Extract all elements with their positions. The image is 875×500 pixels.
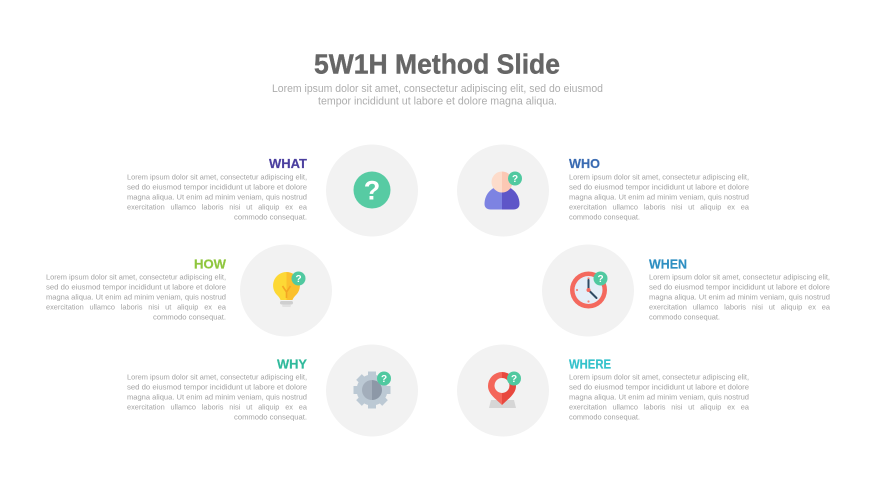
subtitle: Lorem ipsum dolor sit amet, consectetur adipiscing elit, sed do eiusmod (272, 83, 603, 95)
text block: what: commodo consequat. (234, 214, 307, 222)
panel: who (457, 144, 749, 236)
icon: question mark: ? (364, 176, 380, 206)
icon: person (484, 172, 522, 210)
text block: when: Lorem ipsum dolor sit amet, consectetur adipiscing elit, (649, 274, 830, 282)
panel: why (127, 344, 418, 436)
icon: person: ? (512, 174, 518, 185)
text block: what: magna aliqua. Ut enim ad minim veniam, quis nostrud (127, 194, 307, 202)
text block: who: sed do eiusmod tempor incididunt ut labore et dolore (569, 184, 749, 192)
text block: how: sed do eiusmod tempor incididunt ut labore et dolore (46, 284, 226, 292)
icon: clock (570, 272, 608, 308)
text block: who: magna aliqua. Ut enim ad minim veniam, quis nostrud (569, 194, 749, 202)
text block: who: exercitation ullamco laboris nisi ut aliquip ex ea (569, 204, 749, 212)
text block: who: commodo consequat. (569, 214, 640, 222)
text block: why: magna aliqua. Ut enim ad minim veniam, quis nostrud (127, 394, 307, 402)
text block: where: exercitation ullamco laboris nisi ut aliquip ex ea (569, 404, 749, 412)
circle: how (240, 244, 332, 336)
heading: why: WHY (277, 356, 307, 372)
subtitle: tempor incididunt ut labore et dolore magna aliqua. (318, 96, 557, 108)
text block: why: Lorem ipsum dolor sit amet, consectetur adipiscing elit, (127, 374, 307, 382)
icon: light bulb: ? (295, 274, 302, 285)
panel: how (46, 244, 332, 336)
text block: how (46, 274, 226, 322)
heading: what: WHAT (269, 156, 307, 171)
panel: what (127, 144, 418, 236)
text block: when: commodo consequat. (649, 314, 720, 322)
icon: map pin: ? (511, 374, 517, 385)
heading: when: WHEN (649, 256, 687, 272)
circle: what (326, 144, 418, 236)
circle: why (326, 344, 418, 436)
icon: gear (354, 372, 391, 408)
panel: where (457, 344, 749, 436)
circle: where (457, 344, 549, 436)
text block: where: magna aliqua. Ut enim ad minim veniam, quis nostrud (569, 394, 749, 402)
text block: where (569, 374, 749, 422)
icon: light bulb (273, 272, 306, 307)
icon: clock: ? (597, 274, 604, 285)
text block: why: exercitation ullamco laboris nisi ut aliquip ex ea (127, 404, 307, 412)
text block: where: sed do eiusmod tempor incididunt ut labore et dolore (569, 384, 749, 392)
icon: question mark (354, 172, 390, 208)
text block: when: sed do eiusmod tempor incididunt ut labore et dolore (649, 284, 830, 292)
text block: who: Lorem ipsum dolor sit amet, consectetur adipiscing elit, (569, 174, 749, 182)
text block: what: sed do eiusmod tempor incididunt ut labore et dolore (127, 184, 307, 192)
text block: how: exercitation ullamco laboris nisi ut aliquip ex ea (46, 304, 226, 312)
circle: when (542, 244, 634, 336)
heading: where: WHERE (569, 356, 611, 372)
circle: who (457, 144, 549, 236)
heading: who: WHO (569, 156, 600, 171)
text block: why: commodo consequat. (234, 414, 307, 422)
text block: where: Lorem ipsum dolor sit amet, consectetur adipiscing elit, (569, 374, 749, 382)
text block: how: Lorem ipsum dolor sit amet, consectetur adipiscing elit, (46, 274, 226, 282)
text block: what: Lorem ipsum dolor sit amet, consectetur adipiscing elit, (127, 174, 307, 182)
text block: how: magna aliqua. Ut enim ad minim veniam, quis nostrud (46, 294, 226, 302)
text block: when: exercitation ullamco laboris nisi ut aliquip ex ea (649, 304, 830, 312)
panel: when (542, 244, 830, 336)
text block: who (569, 174, 749, 222)
text block: why: sed do eiusmod tempor incididunt ut labore et dolore (127, 384, 307, 392)
subtitle (272, 83, 603, 108)
heading: how: HOW (194, 256, 227, 272)
icon: gear: ? (381, 374, 387, 385)
text block: what (127, 174, 307, 222)
text block: where: commodo consequat. (569, 414, 640, 422)
text block: what: exercitation ullamco laboris nisi ut aliquip ex ea (127, 204, 307, 212)
text block: why (127, 374, 307, 422)
icon: map pin (488, 372, 521, 408)
text block: how: commodo consequat. (153, 314, 226, 322)
text block: when: magna aliqua. Ut enim ad minim veniam, quis nostrud (649, 294, 830, 302)
title: 5W1H Method Slide (314, 48, 560, 80)
text block: when (649, 274, 830, 322)
